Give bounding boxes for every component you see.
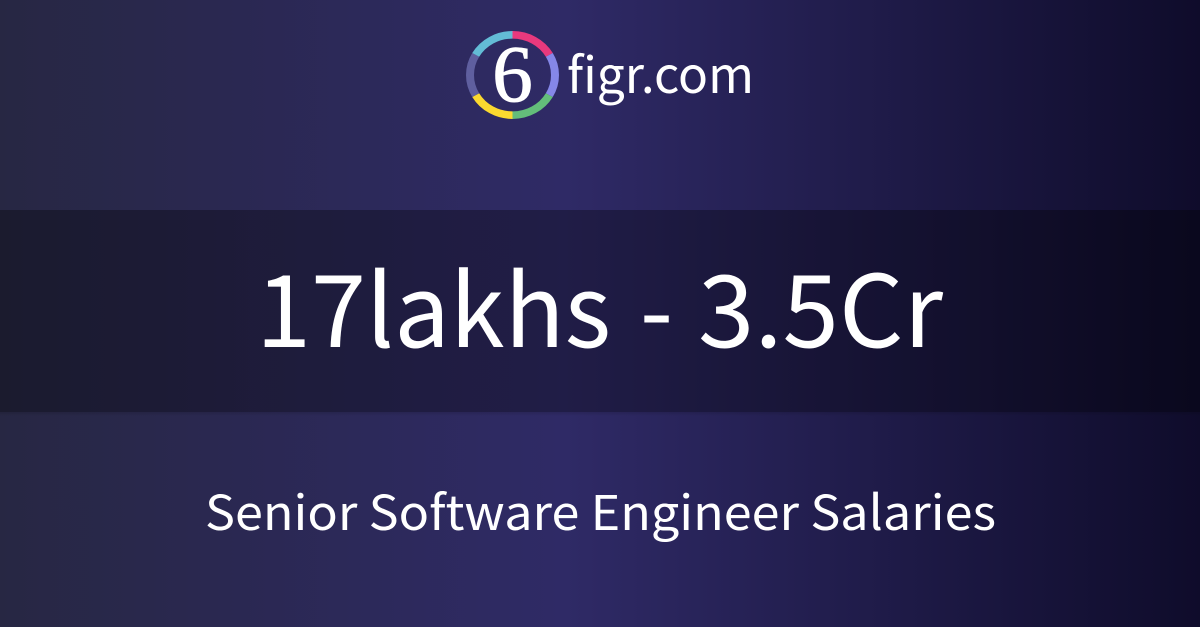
salary range figure: 3.5Cr <box>698 231 943 376</box>
salary range figure: - <box>640 231 673 376</box>
icon: numeral six: 6 <box>492 29 533 119</box>
subtitle: Senior Software Engineer Salaries <box>205 474 996 544</box>
band: salary range <box>0 210 1200 416</box>
logo wordmark: figr.com <box>567 36 754 108</box>
icon: segmented ring <box>470 35 555 115</box>
salary range figure: 17lakhs <box>256 231 611 376</box>
logo <box>470 29 754 119</box>
